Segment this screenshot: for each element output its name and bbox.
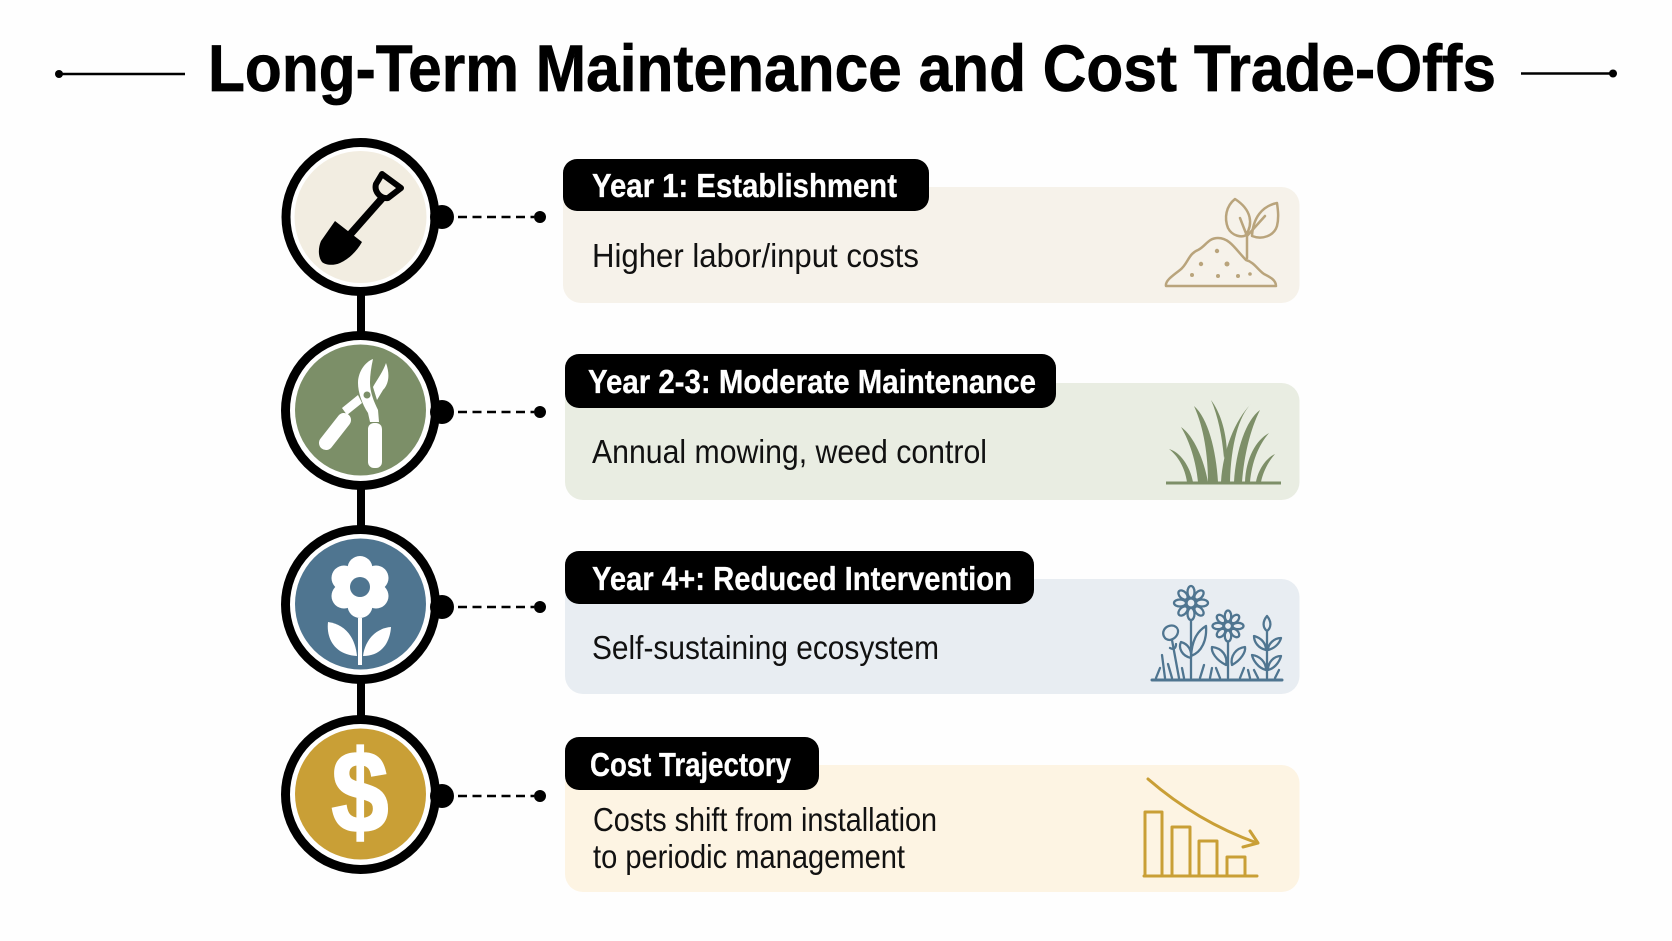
step 1: establishment — [286, 142, 1300, 303]
label: year 1 — [563, 159, 929, 211]
icon: wildflowers — [1152, 586, 1282, 680]
body text: Annual mowing, weed control — [592, 433, 987, 470]
connector dashes — [430, 205, 546, 229]
icon: grass — [1166, 400, 1281, 484]
node: shovel — [286, 142, 435, 292]
node: flower — [286, 530, 436, 680]
label: year 4+ — [565, 551, 1034, 604]
icon: declining cost chart — [1144, 779, 1258, 876]
panel: year 2-3 — [565, 354, 1300, 500]
label: year 4+: Year 4+: Reduced Intervention — [592, 560, 1012, 597]
panel: year 1 — [563, 159, 1300, 303]
label: year 2-3 — [565, 354, 1056, 408]
body text: to periodic management — [593, 838, 905, 875]
label: year 2-3: Year 2-3: Moderate Maintenance — [588, 363, 1036, 400]
step 2: moderate maintenance — [286, 336, 1300, 500]
title: Long-Term Maintenance and Cost Trade-Offs — [208, 31, 1496, 105]
panel: cost trajectory — [565, 737, 1300, 892]
body text: Self-sustaining ecosystem — [592, 629, 939, 666]
connector dashes — [430, 400, 546, 424]
label: cost trajectory — [565, 737, 819, 790]
connector dashes — [430, 784, 546, 808]
node: dollar: $ — [332, 728, 388, 857]
label: year 1: Year 1: Establishment — [592, 167, 897, 204]
step 3: reduced intervention — [286, 530, 1300, 694]
node: dollar — [286, 720, 436, 870]
body text: Higher labor/input costs — [592, 237, 919, 274]
timeline connector — [357, 290, 365, 720]
body text: Costs shift from installation — [593, 801, 937, 838]
body text — [593, 801, 937, 875]
icon: soil mound and sprout — [1166, 199, 1278, 286]
connector dashes — [430, 595, 546, 619]
label: cost trajectory: Cost Trajectory — [590, 746, 792, 783]
node: pruners — [286, 336, 436, 486]
panel: year 4+ — [565, 551, 1300, 694]
step 4: cost trajectory — [286, 720, 1300, 892]
